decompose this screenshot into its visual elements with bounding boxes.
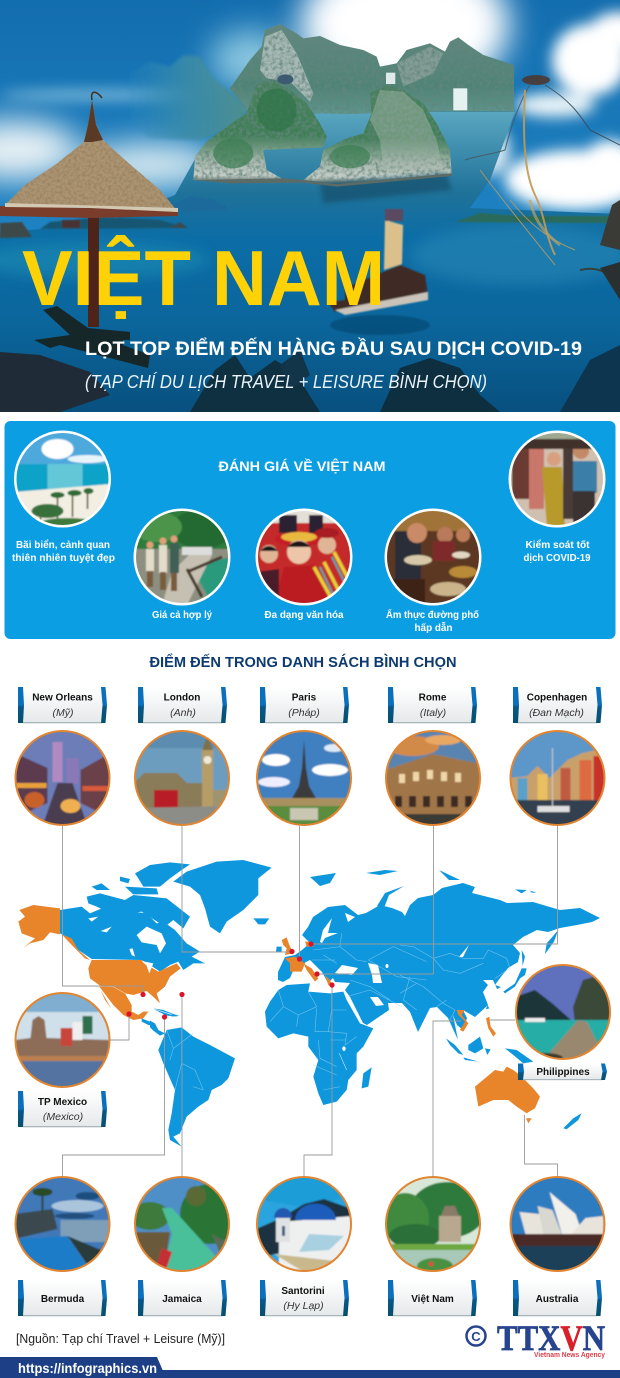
world map — [18, 860, 600, 1147]
map: Baltic — [320, 918, 338, 943]
logo: TTXVN: C — [471, 1329, 481, 1344]
art: karst islands — [130, 24, 514, 210]
item: culture — [256, 508, 352, 621]
destination: Australia — [510, 1176, 606, 1316]
art: foreground lounge chair and foliage — [0, 306, 620, 412]
map: Europe and Middle East borders and highlights — [276, 933, 427, 1010]
item: beach — [12, 430, 115, 564]
destination: Bermuda — [14, 1176, 110, 1316]
subtitle: LỌT TOP ĐIỂM ĐẾN HÀNG ĐẦU SAU DỊCH COVID-19 — [85, 338, 582, 360]
tag: New Orleans: (Mỹ) — [52, 707, 74, 719]
tag: Santorini: Santorini — [281, 1286, 325, 1297]
tag: Bermuda: Bermuda — [41, 1294, 85, 1305]
destination: Paris — [256, 687, 352, 826]
destination: Santorini — [256, 1176, 352, 1316]
tag: TP Mexico — [18, 1091, 107, 1127]
map: Black Sea — [335, 965, 358, 975]
destination: Rome — [385, 687, 481, 826]
map: Asia islands and Oceania — [400, 889, 582, 1129]
tag: Copenhagen — [513, 687, 602, 723]
tag: Philippines: Philippines — [536, 1067, 590, 1078]
caption: covid control line 2: dịch COVID-19 — [524, 552, 591, 564]
tag: Viet Nam — [388, 1280, 477, 1316]
destination: Jamaica — [134, 1176, 230, 1316]
tag: Rome — [388, 687, 477, 723]
tag: TP Mexico: TP Mexico — [38, 1097, 87, 1108]
map: South America and Africa — [150, 983, 373, 1147]
panel: hero photo of Ha Long Bay — [0, 0, 620, 412]
footer url: https://infographics.vn — [18, 1360, 157, 1376]
tag: London — [138, 687, 227, 723]
caption: street food line 2: hấp dẫn — [414, 621, 452, 634]
tag: Jamaica: Jamaica — [162, 1294, 202, 1305]
tag: Paris — [260, 687, 349, 723]
item: prices — [132, 508, 232, 621]
map markers — [126, 941, 335, 1020]
tag: Rome: Rome — [419, 692, 447, 704]
logo: TTXVN: TTXVN — [497, 1318, 605, 1358]
item: street food — [384, 508, 482, 634]
connector lines — [62, 826, 558, 1176]
tag: Santorini — [260, 1280, 349, 1316]
destination: Viet Nam — [381, 1176, 486, 1316]
destination: New Orleans — [14, 687, 110, 826]
panel: assessment of Vietnam — [4, 421, 616, 639]
caption: prices: Giá cả hợp lý — [152, 609, 212, 621]
tag: Paris: (Pháp) — [288, 707, 320, 719]
tag: Copenhagen: (Đan Mạch) — [529, 707, 584, 719]
tag: Copenhagen: Copenhagen — [527, 692, 587, 704]
footer bar — [0, 1357, 620, 1378]
caption: culture: Đa dạng văn hóa — [264, 609, 344, 621]
logo: TTXVN: Vietnam News Agency — [534, 1352, 605, 1359]
destination: Copenhagen — [510, 687, 606, 826]
tag: London: (Anh) — [170, 707, 196, 719]
title: VIỆT NAM — [22, 234, 385, 322]
map: Caspian — [368, 963, 382, 983]
caption: covid control: Kiểm soát tốt — [526, 539, 590, 551]
destination: Philippines — [515, 964, 611, 1080]
tag: TP Mexico: (Mexico) — [43, 1111, 83, 1123]
map: Americas north — [18, 860, 272, 1025]
heading: destinations: ĐIỂM ĐẾN TRONG DANH SÁCH BÌNH CHỌN — [150, 653, 456, 671]
art: distant hills — [0, 196, 612, 238]
caption: beach line 2: thiên nhiên tuyệt đẹp — [12, 552, 115, 564]
map: Hudson Bay — [137, 927, 166, 953]
tag: New Orleans — [18, 687, 107, 723]
caption: beach: Bãi biển, cảnh quan — [16, 539, 110, 551]
tag: Paris: Paris — [292, 692, 317, 704]
tag: New Orleans: New Orleans — [32, 692, 93, 704]
caption: street food: Ẩm thực đường phố — [386, 608, 480, 621]
map: Eurasia — [278, 870, 600, 1040]
tag: Australia — [513, 1280, 602, 1316]
item: covid control — [508, 430, 606, 564]
tag: Santorini: (Hy Lạp) — [283, 1300, 324, 1312]
tag: Rome: (Italy) — [420, 707, 446, 719]
art: bamboo umbrella — [0, 92, 178, 327]
tag: London: London — [164, 692, 200, 704]
heading: assessment: ĐÁNH GIÁ VỀ VIỆT NAM — [218, 457, 386, 474]
source note: [Nguồn: Tạp chí Travel + Leisure (Mỹ)] — [16, 1331, 225, 1346]
destination: London — [134, 687, 230, 826]
tag: Bermuda — [18, 1280, 107, 1316]
subtitle source note: (TẠP CHÍ DU LỊCH TRAVEL + LEISURE BÌNH CHỌN) — [85, 371, 487, 392]
tag: Jamaica — [138, 1280, 227, 1316]
tag: Viet Nam: Việt Nam — [411, 1294, 454, 1305]
art: fishing net — [465, 75, 620, 285]
tag: Australia: Australia — [536, 1294, 579, 1305]
art: junk boat — [328, 209, 430, 335]
destination: TP Mexico — [14, 992, 110, 1127]
